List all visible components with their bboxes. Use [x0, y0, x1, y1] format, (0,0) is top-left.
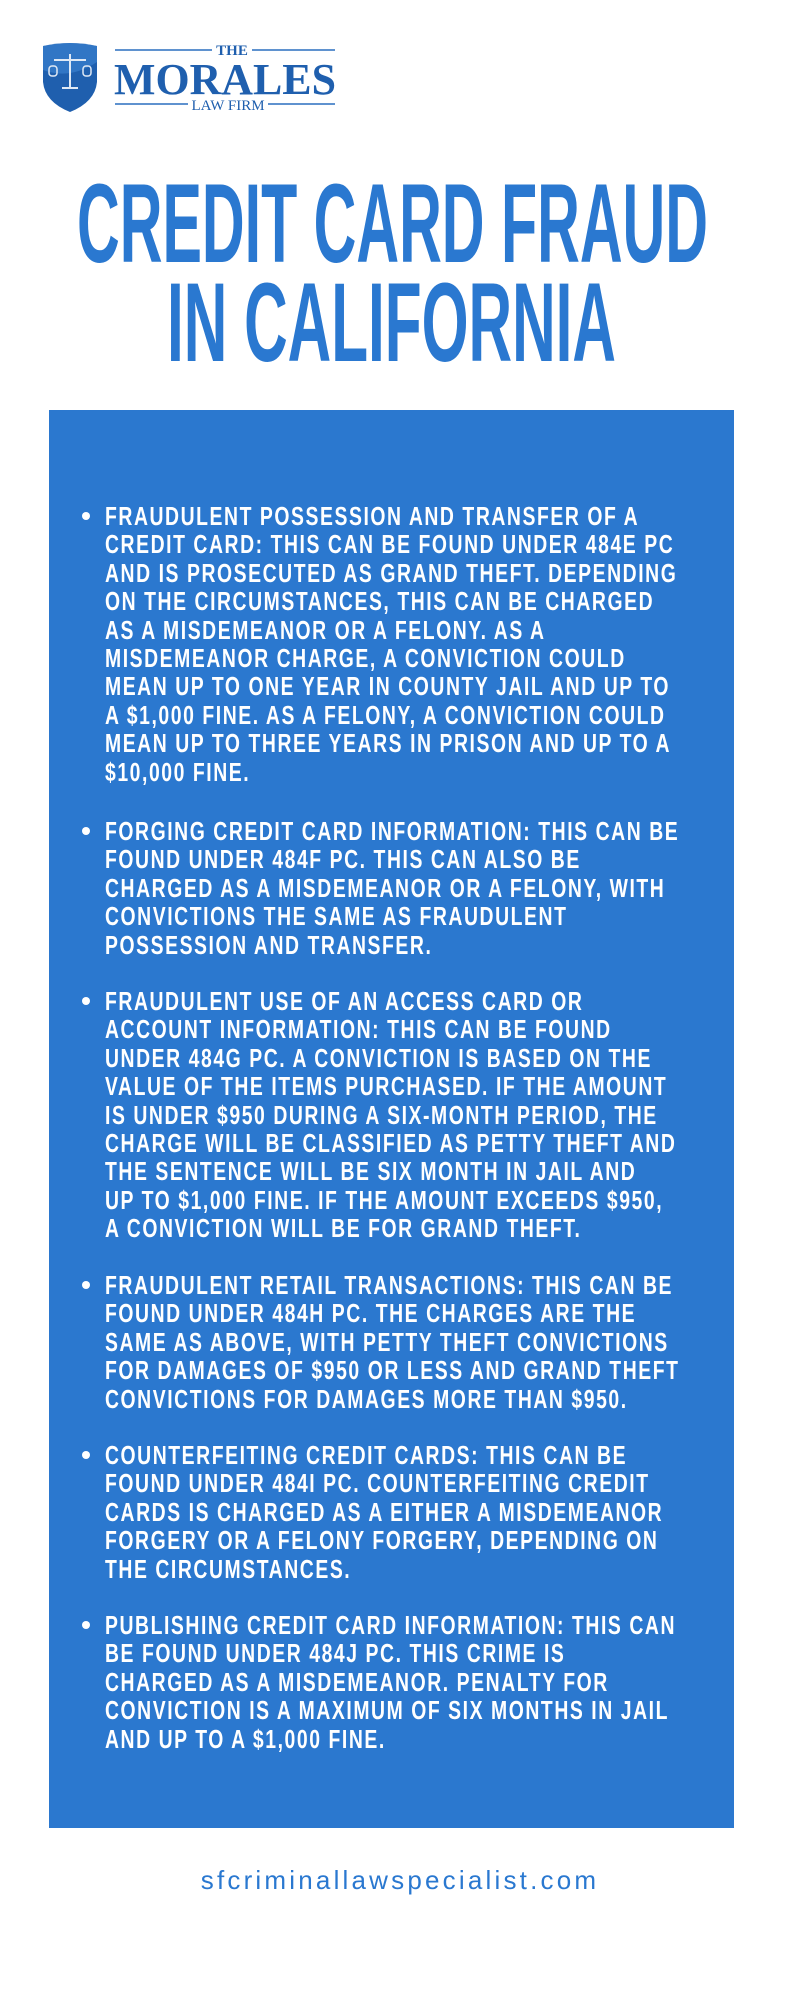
item: fraudulent possession: A $1,000 FINE. AS A FELONY, A CONVICTION COULD [105, 700, 666, 730]
item: counterfeiting: FOUND UNDER 484I PC. COUNTERFEITING CREDIT [105, 1468, 650, 1498]
item: fraudulent possession: $10,000 FINE. [105, 757, 250, 787]
item: fraudulent possession: MEAN UP TO THREE YEARS IN PRISON AND UP TO A [105, 728, 671, 758]
item: retail transactions: FOR DAMAGES OF $950 OR LESS AND GRAND THEFT [105, 1355, 680, 1385]
item: forging: FOUND UNDER 484F PC. THIS CAN ALSO BE [105, 844, 581, 874]
item: publishing: BE FOUND UNDER 484J PC. THIS CRIME IS [105, 1638, 565, 1668]
item: forging: CONVICTIONS THE SAME AS FRAUDULENT [105, 901, 567, 931]
panel: offenses list [49, 410, 734, 1828]
item: fraudulent possession: MISDEMEANOR CHARGE, A CONVICTION COULD [105, 643, 626, 673]
item: publishing: CONVICTION IS A MAXIMUM OF SIX MONTHS IN JAIL [105, 1695, 669, 1725]
item: counterfeiting: THE CIRCUMSTANCES. [105, 1554, 351, 1584]
item: access card: THE SENTENCE WILL BE SIX MONTH IN JAIL AND [105, 1156, 636, 1186]
item: counterfeiting [82, 1440, 663, 1584]
logo text: MORALES [114, 55, 336, 104]
logo text: LAW FIRM [191, 98, 265, 114]
item: access card: FRAUDULENT USE OF AN ACCESS CARD OR [105, 986, 583, 1016]
item: fraudulent possession: MEAN UP TO ONE YEAR IN COUNTY JAIL AND UP TO [105, 671, 670, 701]
item: retail transactions: CONVICTIONS FOR DAMAGES MORE THAN $950. [105, 1384, 628, 1414]
item: fraudulent possession: AS A MISDEMEANOR OR A FELONY. AS A [105, 615, 546, 645]
item: fraudulent possession: CREDIT CARD: THIS CAN BE FOUND UNDER 484E PC [105, 529, 674, 559]
item: publishing: AND UP TO A $1,000 FINE. [105, 1724, 386, 1754]
item: fraudulent possession [82, 501, 677, 787]
item: access card: UNDER 484G PC. A CONVICTION IS BASED ON THE [105, 1043, 652, 1073]
item: access card: VALUE OF THE ITEMS PURCHASED. IF THE AMOUNT [105, 1071, 667, 1101]
title [77, 161, 708, 380]
item: counterfeiting: FORGERY OR A FELONY FORGERY, DEPENDING ON [105, 1525, 658, 1555]
item: retail transactions: SAME AS ABOVE, WITH PETTY THEFT CONVICTIONS [105, 1327, 669, 1357]
item: access card: UP TO $1,000 FINE. IF THE AMOUNT EXCEEDS $950, [105, 1185, 663, 1215]
item: fraudulent possession: FRAUDULENT POSSESSION AND TRANSFER OF A [105, 501, 639, 531]
icon: shield with scales [43, 43, 97, 112]
item: forging: CHARGED AS A MISDEMEANOR OR A FELONY, WITH [105, 873, 665, 903]
item: counterfeiting: CARDS IS CHARGED AS A EITHER A MISDEMEANOR [105, 1497, 663, 1527]
item: access card: IS UNDER $950 DURING A SIX-MONTH PERIOD, THE [105, 1100, 658, 1130]
item: forging [82, 816, 679, 960]
logo text [114, 43, 336, 114]
item: fraudulent possession: AND IS PROSECUTED AS GRAND THEFT. DEPENDING [105, 558, 677, 588]
item: access card: ACCOUNT INFORMATION: THIS CAN BE FOUND [105, 1014, 612, 1044]
panel: offenses list: POSSESSION AND TRANSFER. [105, 930, 432, 960]
footer url: sfcriminallawspecialist.com [201, 1865, 599, 1895]
logo text: THE [216, 43, 248, 59]
item: retail transactions [82, 1270, 680, 1414]
item: access card: CHARGE WILL BE CLASSIFIED AS PETTY THEFT AND [105, 1128, 676, 1158]
item: publishing: CHARGED AS A MISDEMEANOR. PENALTY FOR [105, 1667, 609, 1697]
item: fraudulent possession: ON THE CIRCUMSTANCES, THIS CAN BE CHARGED [105, 586, 654, 616]
item: publishing: PUBLISHING CREDIT CARD INFORMATION: THIS CAN [105, 1610, 676, 1640]
item: access card: A CONVICTION WILL BE FOR GRAND THEFT. [105, 1213, 581, 1243]
item: forging: FORGING CREDIT CARD INFORMATION: THIS CAN BE [105, 816, 679, 846]
item: counterfeiting: COUNTERFEITING CREDIT CARDS: THIS CAN BE [105, 1440, 627, 1470]
item: access card [82, 986, 676, 1243]
logo [43, 43, 336, 114]
item: retail transactions: FOUND UNDER 484H PC. THE CHARGES ARE THE [105, 1298, 636, 1328]
item: retail transactions: FRAUDULENT RETAIL TRANSACTIONS: THIS CAN BE [105, 1270, 673, 1300]
item: publishing [82, 1610, 676, 1754]
